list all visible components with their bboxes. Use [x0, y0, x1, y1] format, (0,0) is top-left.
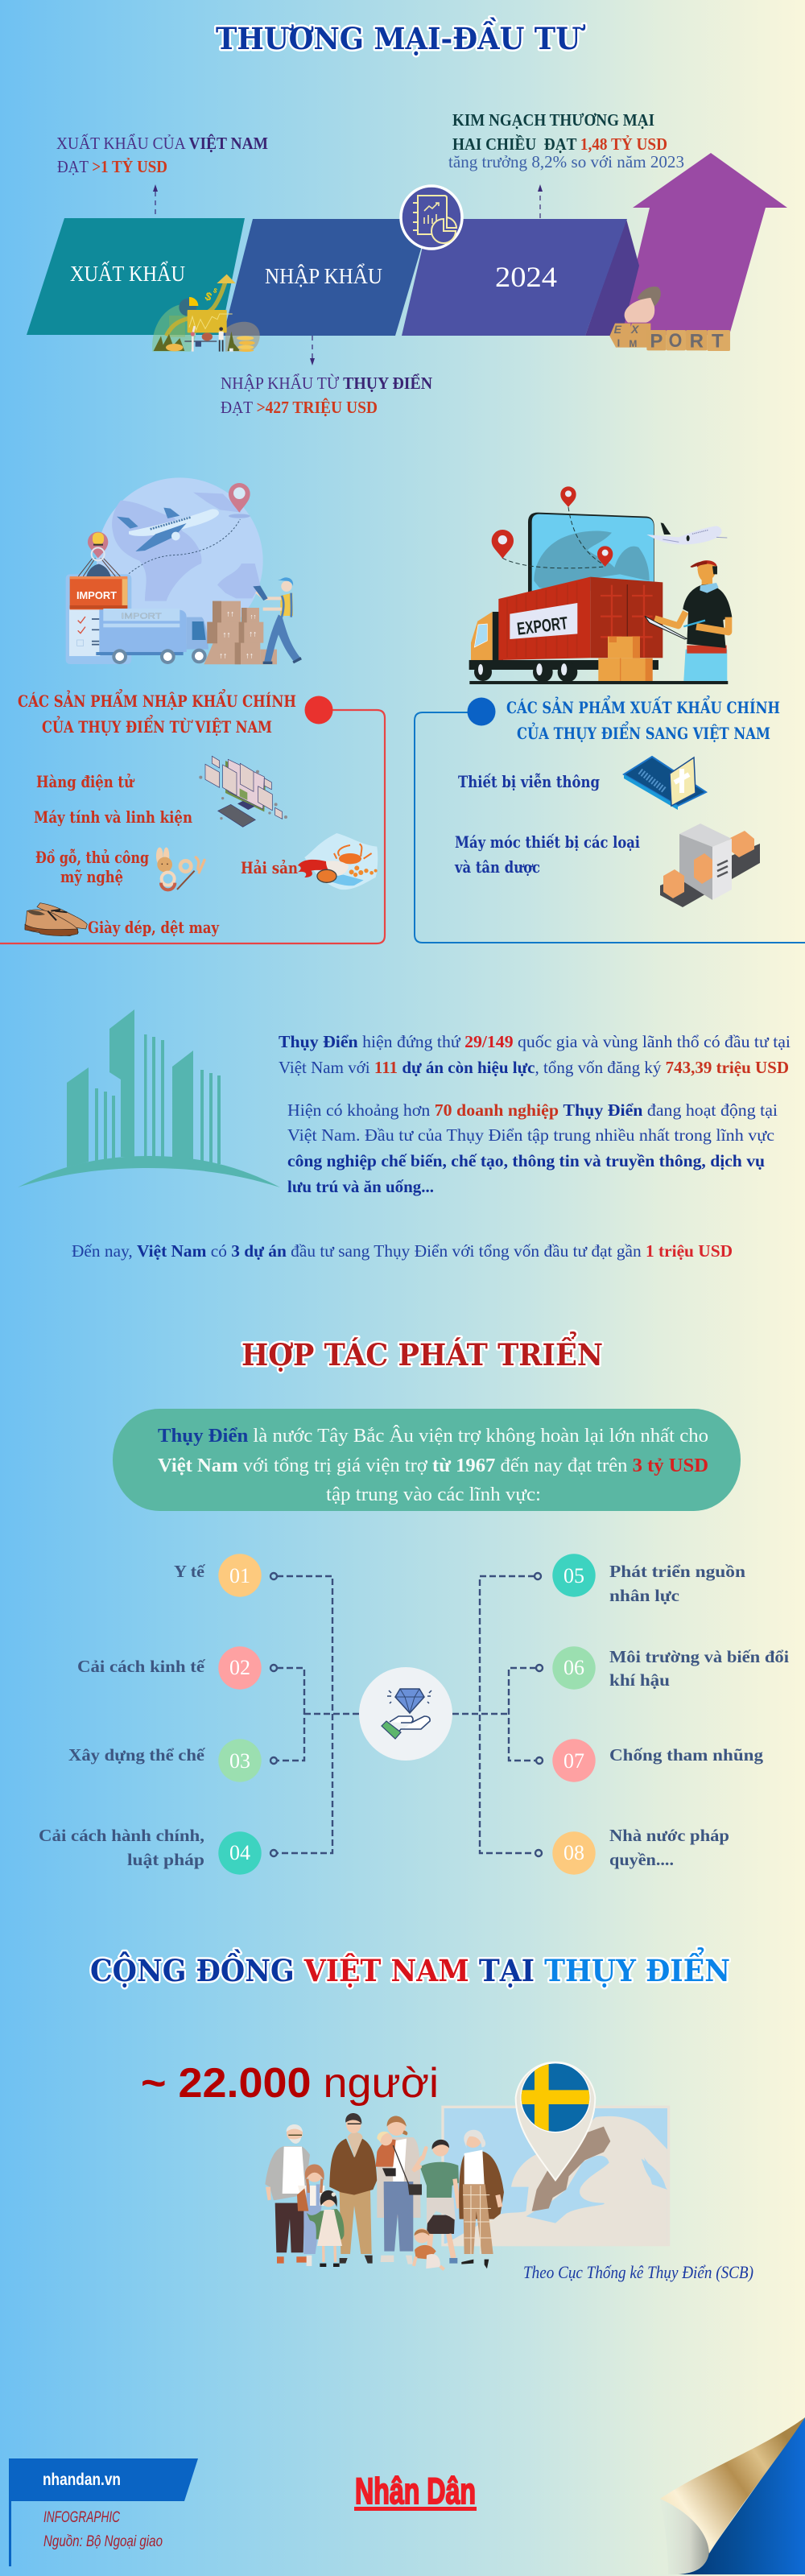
labels: left column: Xây dựng thể chế — [68, 1745, 206, 1765]
connectors — [277, 1576, 536, 1853]
icon: EX/IM PORT blocks with hand: P — [650, 330, 663, 352]
fold: dark connector — [585, 219, 639, 336]
icon: wooden toys — [156, 848, 204, 890]
heading: imports: CÁC SẢN PHẨM NHẬP KHẨU CHÍNH — [18, 687, 296, 711]
tall girl — [297, 2165, 324, 2266]
statistic: 22.000 people: ~ 22.000 người — [141, 2060, 439, 2107]
heading: Hợp tác phát triển: HỢP TÁC PHÁT TRIỂN — [242, 1331, 603, 1373]
list: import products: Máy tính và linh kiện — [34, 808, 192, 827]
illustration: import logistics: ↑↑ — [246, 651, 254, 660]
panel: xuất khẩu: XUẤT KHẨU — [70, 261, 185, 286]
boy — [413, 2140, 459, 2264]
text: Swedish enterprises — [287, 1100, 778, 1196]
labels: right column: quyền.... — [609, 1850, 674, 1869]
icon: EX/IM PORT blocks with hand: X — [630, 323, 640, 336]
labels: right column: khí hậu — [609, 1670, 670, 1690]
small girl — [307, 2190, 344, 2267]
annotation arrow: 2024 — [538, 184, 543, 218]
footer: source tag: Nguồn: Bộ Ngoại giao — [43, 2533, 163, 2550]
item circles and numbers: 06 — [564, 1656, 584, 1679]
text: Swedish enterprises: Việt Nam. Đầu tư của Thụy Điển tập trung nhiều nhất trong lĩnh vực — [287, 1125, 774, 1145]
icon: EX/IM PORT blocks with hand: R — [690, 330, 704, 352]
father — [329, 2113, 377, 2264]
labels: right column: Phát triển nguồn — [609, 1562, 745, 1581]
text: xuất khẩu của Việt Nam: XUẤT KHẨU CỦA VIỆT NAM — [56, 134, 268, 153]
icon: EX/IM PORT blocks with hand: I — [617, 338, 620, 349]
text: Swedish enterprises: lưu trú và ăn uống... — [287, 1177, 434, 1196]
item circles and numbers: 01 — [229, 1564, 250, 1587]
list: export products — [454, 772, 640, 877]
text: Sweden investment ranking: Việt Nam với 111 dự án còn hiệu lực, tổng vốn đăng ký 743,39 triệu USD — [279, 1058, 789, 1077]
panel: 2024: 2024 — [495, 261, 557, 293]
text: nhập khẩu từ Thụy Điển — [221, 374, 432, 417]
text: Swedish enterprises: công nghiệp chế biến, chế tạo, thông tin và truyền thông, dịch vụ — [287, 1151, 765, 1170]
labels: right column: Môi trường và biến đổi — [609, 1647, 789, 1666]
callout: aid summary — [113, 1409, 741, 1511]
panel: nhập khẩu — [223, 219, 430, 336]
footer: source tag: INFOGRAPHIC — [43, 2509, 120, 2526]
illustration: import logistics: IMPORT — [76, 589, 117, 601]
text: Vietnam investment in Sweden: Đến nay, Việt Nam có 3 dự án đầu tư sang Thụy Điển với tổng vốn đầu tư đạt gần 1 triệu USD — [72, 1241, 733, 1261]
illustration: import logistics: ↑↑ — [219, 651, 227, 660]
arrow: purple up arrow — [619, 153, 787, 335]
illustration: import logistics: ↑↑ — [226, 609, 234, 618]
item circles and numbers: 02 — [229, 1656, 250, 1679]
text: Sweden investment ranking — [279, 1032, 791, 1077]
footer: source tag: nhandan.vn — [43, 2471, 121, 2489]
labels: right column: nhân lực — [609, 1586, 679, 1605]
text: xuất khẩu của Việt Nam: ĐẠT >1 TỶ USD — [57, 157, 167, 176]
diagram: eight cooperation areas — [39, 1554, 789, 1875]
footer: source tag — [9, 2458, 198, 2566]
illustration: import logistics: ↑↑ — [250, 613, 257, 621]
marker: blue circle — [467, 697, 496, 726]
icon: diamond in hand — [359, 1667, 452, 1761]
list: export products: Thiết bị viễn thông — [458, 772, 600, 791]
list: import products: Giày dép, dệt may — [88, 919, 220, 937]
heading: exports — [506, 694, 780, 743]
annotation arrow: nhập khẩu — [310, 336, 315, 365]
labels: left column: luật pháp — [127, 1850, 204, 1869]
illustration: map of Sweden with pin — [443, 2062, 669, 2245]
grandmother — [459, 2130, 504, 2268]
labels: left column: Cải cách kinh tế — [77, 1657, 206, 1676]
icon: export growth illustration — [152, 275, 260, 352]
item circles and numbers: 03 — [229, 1749, 250, 1773]
icon: machinery conveyor — [660, 824, 760, 907]
mother with baby — [376, 2116, 422, 2264]
panel: main exports to Vietnam — [415, 694, 805, 943]
item circles and numbers: 07 — [564, 1749, 584, 1773]
item circles and numbers: 08 — [564, 1841, 584, 1864]
icon: telecom device — [624, 757, 706, 810]
heading: Cộng đồng Việt Nam tại Thụy Điển: CỘNG ĐỒNG VIỆT NAM TẠI THỤY ĐIỂN — [90, 1947, 730, 1988]
labels: left column: Cải cách hành chính, — [39, 1826, 204, 1845]
illustration: family group — [265, 2113, 504, 2269]
icon: export growth illustration: $ — [213, 287, 218, 295]
icon: export growth illustration: $ — [204, 289, 214, 303]
panel: main imports from Vietnam — [0, 687, 385, 943]
icon: report in circle — [401, 186, 462, 249]
text: kim ngạch thương mại hai chiều: HAI CHIỀU ĐẠT 1,48 TỶ USD — [452, 134, 667, 154]
list: import products: mỹ nghệ — [60, 868, 123, 886]
illustration: export truck — [469, 486, 732, 684]
illustration: export truck: EXPORT — [516, 613, 569, 639]
toddler — [414, 2228, 444, 2269]
list: import products: Hàng điện tử — [36, 772, 135, 791]
callout: aid summary: Thụy Điển là nước Tây Bắc Âu viện trợ không hoàn lại lớn nhất cho — [158, 1426, 708, 1447]
text: nhập khẩu từ Thụy Điển: NHẬP KHẨU TỪ THỤY ĐIỂN — [221, 374, 432, 393]
text: Swedish enterprises: Hiện có khoảng hơn 70 doanh nghiệp Thụy Điển đang hoạt động tại — [287, 1100, 778, 1120]
icon: EX/IM PORT blocks with hand: T — [712, 330, 724, 352]
logo: Nhân Dân: Nhân Dân — [355, 2471, 476, 2512]
illustration: import logistics: ↑↑ — [249, 630, 257, 639]
marker: red circle — [304, 696, 333, 724]
page curl corner — [660, 2417, 805, 2574]
text: kim ngạch thương mại hai chiều — [448, 110, 684, 171]
list: import products — [34, 772, 298, 937]
trade chevron diagram — [27, 153, 787, 352]
icon: EX/IM PORT blocks with hand: E — [614, 323, 622, 336]
icon: buildings — [18, 1009, 280, 1187]
text: kim ngạch thương mại hai chiều: KIM NGẠCH THƯƠNG MẠI — [452, 110, 654, 130]
list: export products: Máy móc thiết bị các loại — [455, 832, 640, 852]
illustration: import logistics: IMPORT — [122, 613, 162, 621]
icon: EX/IM PORT blocks with hand: M — [629, 338, 637, 349]
text: nhập khẩu từ Thụy Điển: ĐẠT >427 TRIỆU USD — [221, 398, 378, 417]
icon: electronics — [199, 756, 287, 827]
text: Sweden investment ranking: Thụy Điển hiện đứng thứ 29/149 quốc gia và vùng lãnh thổ có đầu tư tại — [279, 1032, 791, 1051]
annotation arrow: xuất khẩu — [153, 184, 158, 214]
source note: Theo Cục Thống kê Thụy Điển (SCB) — [523, 2262, 753, 2282]
list: import products: Hải sản — [241, 858, 298, 877]
text: xuất khẩu của Việt Nam — [56, 134, 268, 176]
panel: nhập khẩu: NHẬP KHẨU — [265, 263, 382, 288]
heading: imports: CỦA THỤY ĐIỂN TỪ VIỆT NAM — [42, 713, 272, 737]
labels: right column — [609, 1562, 789, 1869]
text: kim ngạch thương mại hai chiều: tăng trưởng 8,2% so với năm 2023 — [448, 152, 684, 171]
labels: left column: Y tế — [174, 1562, 206, 1581]
item circles and numbers — [218, 1554, 596, 1875]
icon: EX/IM PORT blocks with hand — [609, 287, 730, 352]
illustration: import logistics — [66, 477, 302, 664]
grandfather — [265, 2124, 310, 2264]
item circles and numbers: 05 — [564, 1564, 584, 1587]
icon: EX/IM PORT blocks with hand: O — [669, 330, 682, 352]
title: Thương mại - Đầu tư: THƯƠNG MẠI-ĐẦU TƯ — [216, 17, 585, 56]
item circles and numbers: 04 — [229, 1841, 250, 1864]
labels: left column — [39, 1562, 206, 1869]
panel: 2024 — [402, 219, 627, 336]
illustration: import logistics: ↑↑ — [223, 630, 231, 639]
list: export products: và tân dược — [454, 858, 540, 877]
heading: imports — [18, 687, 296, 737]
icon: shoes — [25, 903, 87, 936]
callout: aid summary: tập trung vào các lĩnh vực: — [326, 1484, 541, 1505]
icon: seafood — [298, 833, 378, 890]
list: import products: Đồ gỗ, thủ công — [35, 848, 149, 867]
labels: right column: Nhà nước pháp — [609, 1826, 729, 1845]
panel: xuất khẩu — [27, 218, 245, 335]
callout: aid summary: Việt Nam với tổng trị giá viện trợ từ 1967 đến nay đạt trên 3 tỷ USD — [158, 1455, 708, 1476]
labels: right column: Chống tham nhũng — [609, 1745, 764, 1765]
